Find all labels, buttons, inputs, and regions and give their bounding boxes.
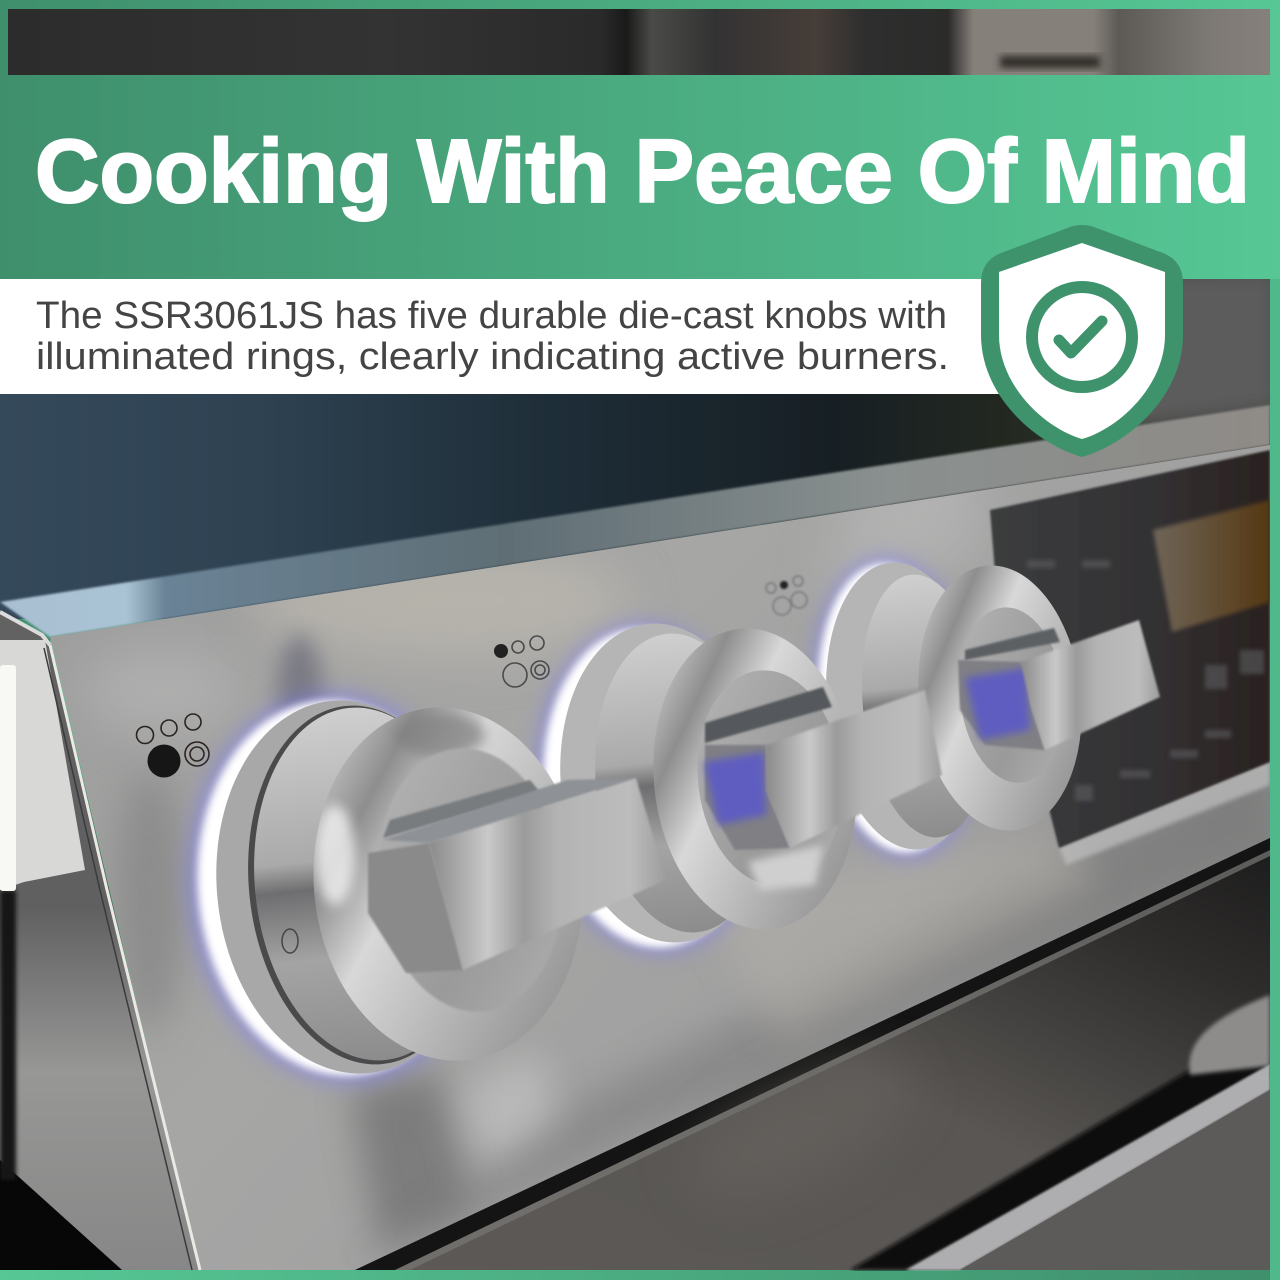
burner icon 3 [766,576,807,615]
chrome corner [0,612,50,645]
clock display [1153,500,1270,632]
burner icon 1 [136,714,209,778]
left side of range [0,610,200,1270]
description text: illuminated rings, clearly indicating active burners. [36,336,949,378]
description text: The SSR3061JS has five durable die-cast knobs with [36,295,947,337]
bottom frame [0,1270,1280,1280]
steel rail [0,405,1270,637]
white description band [0,279,1010,394]
description text [36,295,949,378]
lower door [340,825,1270,1270]
backguard reflection [1130,270,1280,430]
panel reflections [80,430,1270,1270]
black corner [0,1160,122,1270]
lower door reflection [670,1032,930,1228]
oven handle [906,1064,1270,1270]
dark seam below panel [355,838,1270,1270]
display panel [990,450,1270,848]
blurred control labels [1027,560,1264,801]
cooktop glass [0,279,1280,619]
photo strip: blurred kitchen background [8,9,1270,75]
panel edge highlight [50,645,200,1270]
green title banner [0,75,1280,279]
stainless control panel [50,445,1270,1270]
towel [1189,995,1270,1075]
burner icon 2 [494,636,549,687]
title: Cooking With Peace Of Mind [35,122,1250,222]
right frame [1270,270,1280,1280]
knob 1 [168,677,666,1099]
photo: stove with illuminated knobs [0,270,1280,1270]
knob 3 [798,548,1160,868]
icon: shield with check mark [981,225,1183,457]
knob 2 [519,611,942,965]
display bright border [1059,760,1270,865]
green frame background [0,0,1280,640]
white tile [0,640,85,890]
oven door gap [850,1060,1270,1270]
